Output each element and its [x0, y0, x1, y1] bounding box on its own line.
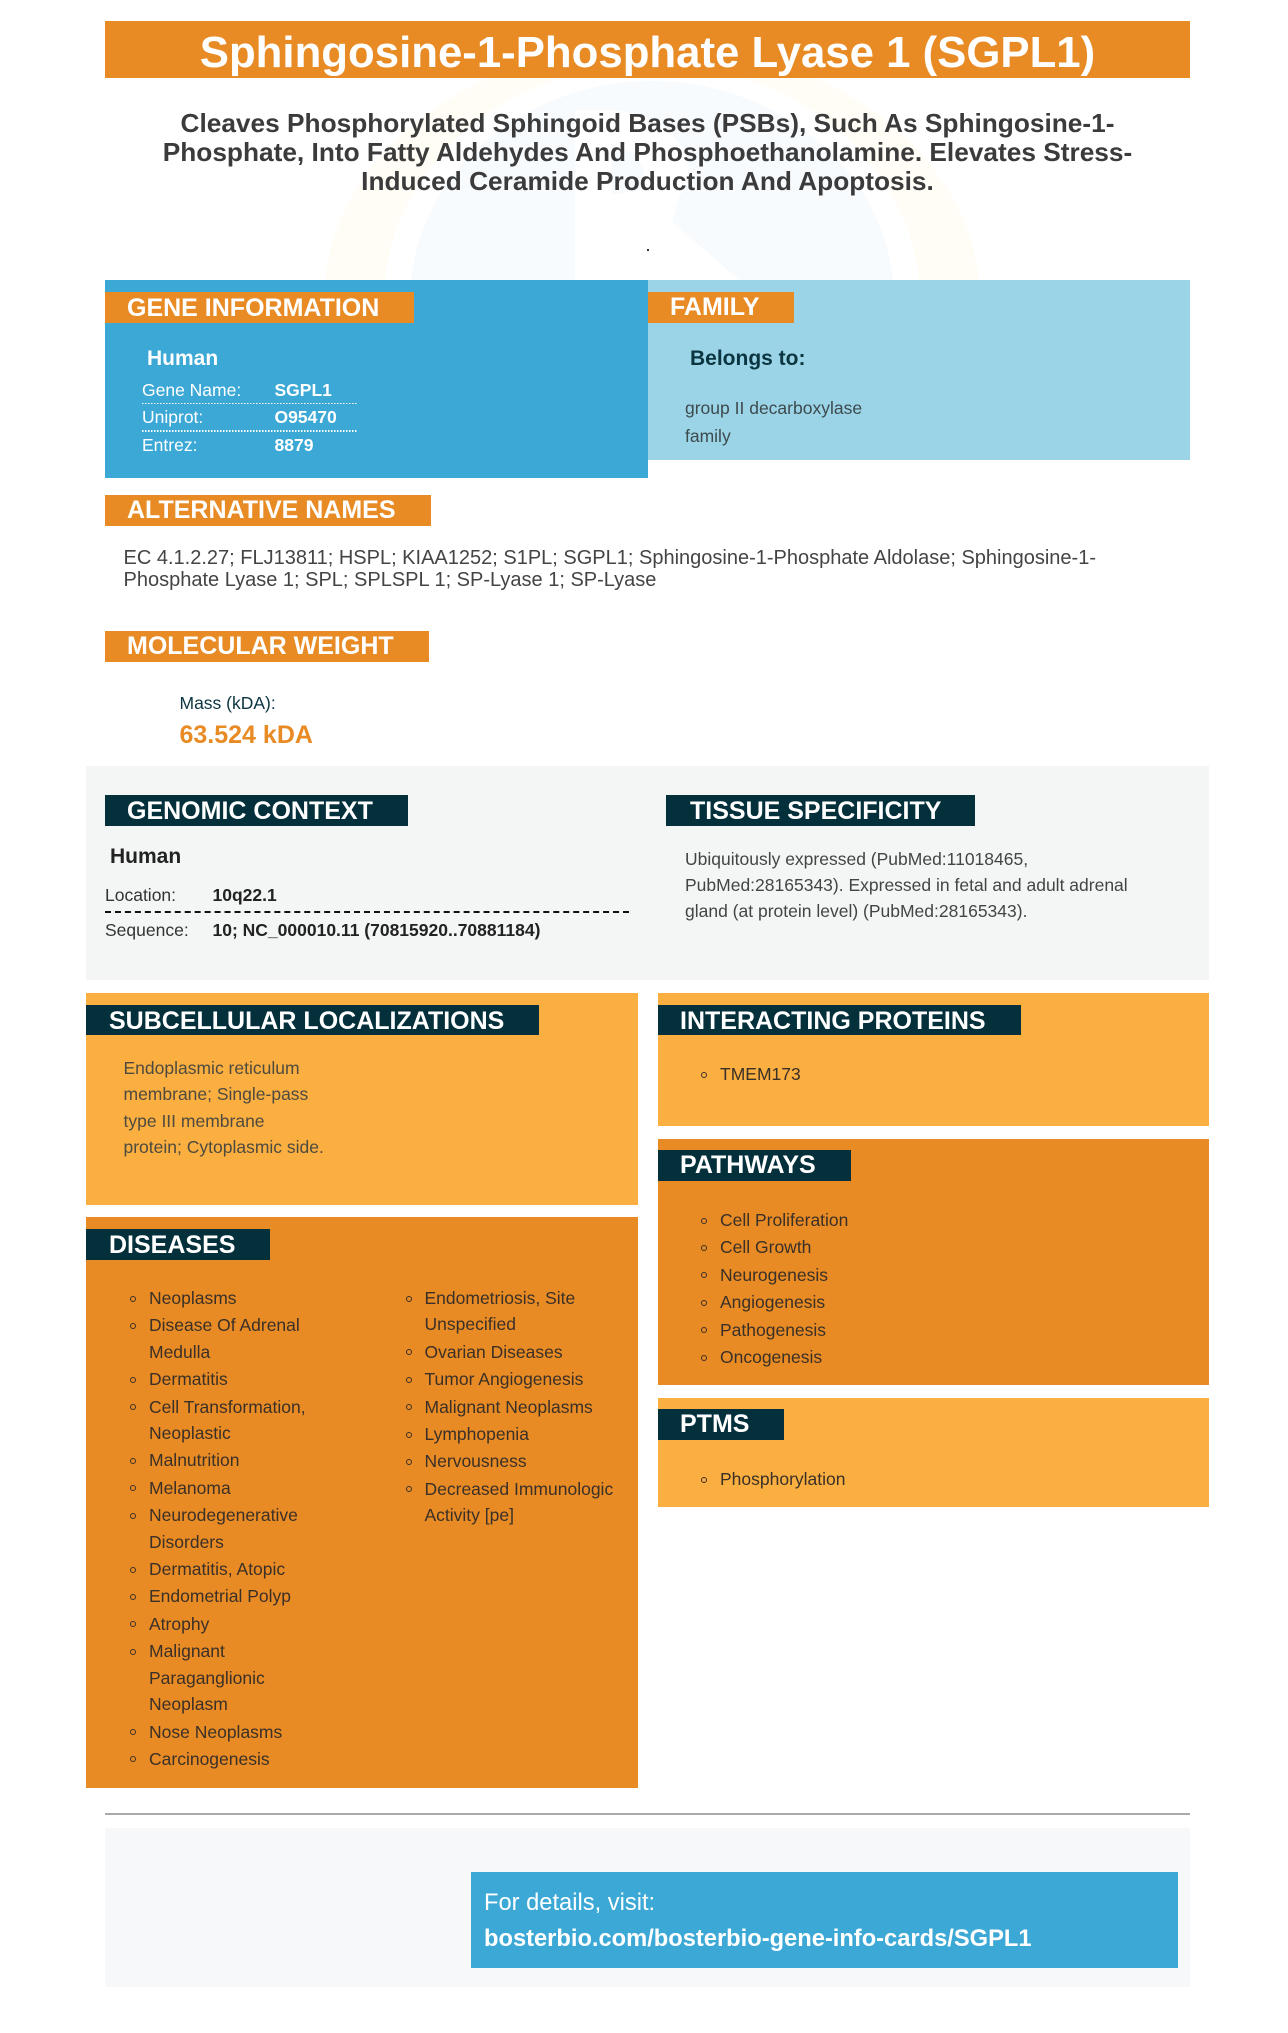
- belongs to label: Belongs to:: [690, 347, 806, 370]
- panel: genomic context and tissue specificity: [86, 766, 1209, 980]
- panel: footer: [105, 1828, 1190, 1987]
- heading: gene information: GENE INFORMATION: [127, 294, 379, 322]
- diseases list column 1: Neurodegenerative Disorders: [149, 1505, 298, 1552]
- diseases list column 1: Neoplasms: [149, 1288, 237, 1308]
- mass label: Mass (kDA):: [180, 693, 276, 713]
- subcellular text: type III membrane: [124, 1111, 265, 1131]
- location row: 10q22.1: [212, 885, 277, 905]
- diseases list column 2: Ovarian Diseases: [424, 1342, 563, 1362]
- uniprot row: O95470: [274, 407, 337, 427]
- panel: interacting proteins: [658, 993, 1209, 1126]
- uniprot row: Uniprot:: [142, 407, 203, 427]
- genomic species label: Human: [110, 845, 181, 868]
- panel: gene information: [105, 280, 648, 478]
- heading: tissue specificity: TISSUE SPECIFICITY: [690, 797, 941, 825]
- pathways list: Cell Growth: [720, 1237, 811, 1257]
- subtitle description: Phosphate, Into Fatty Aldehydes And Phosphoethanolamine. Elevates Stress-: [163, 137, 1132, 167]
- diseases list column 1: Dermatitis, Atopic: [149, 1559, 285, 1579]
- callout: details link: [471, 1872, 1178, 1968]
- heading: alternative names: ALTERNATIVE NAMES: [127, 496, 396, 524]
- callout url: bosterbio.com/bosterbio-gene-info-cards/SGPL1: [484, 1926, 1032, 1952]
- family text: family: [685, 426, 731, 446]
- alternative names text: [124, 546, 1096, 590]
- subtitle description: [163, 108, 1132, 196]
- heading: pathways: PATHWAYS: [680, 1151, 816, 1179]
- diseases list column 1: Cell Transformation, Neoplastic: [149, 1397, 306, 1443]
- diseases list column 1: Melanoma: [149, 1478, 231, 1498]
- panel: family: [648, 280, 1190, 460]
- family text: [685, 398, 862, 446]
- panel: ptms: [658, 1398, 1209, 1507]
- panel: pathways: [658, 1139, 1209, 1385]
- gene name row: Gene Name:: [142, 380, 241, 400]
- small dot: [647, 249, 649, 251]
- tissue specificity text: PubMed:28165343). Expressed in fetal and adult adrenal: [685, 875, 1128, 895]
- ptms list: Phosphorylation: [720, 1469, 846, 1489]
- title: Sphingosine-1-Phosphate Lyase 1 (SGPL1): [200, 28, 1095, 77]
- diseases list column 1: Dermatitis: [149, 1369, 228, 1389]
- subcellular text: membrane; Single-pass: [124, 1084, 308, 1104]
- family text: group II decarboxylase: [685, 398, 862, 418]
- diseases list column 1: Nose Neoplasms: [149, 1722, 282, 1742]
- uniprot row: [142, 407, 337, 427]
- heading: family: FAMILY: [670, 293, 759, 321]
- heading: pathways: [658, 1150, 851, 1181]
- panel: diseases: [86, 1217, 638, 1788]
- heading: interacting proteins: INTERACTING PROTEINS: [680, 1007, 986, 1035]
- pathways list: Cell Proliferation: [720, 1210, 848, 1230]
- heading: ptms: [658, 1409, 784, 1440]
- heading: diseases: DISEASES: [109, 1231, 235, 1259]
- diseases list column 2: Nervousness: [424, 1451, 527, 1471]
- species label: Human: [147, 347, 218, 370]
- pathways list: Neurogenesis: [720, 1265, 828, 1285]
- diseases list column 1: Malnutrition: [149, 1450, 239, 1470]
- background watermark logo: [326, 78, 978, 280]
- heading: molecular weight: MOLECULAR WEIGHT: [127, 632, 394, 660]
- tissue specificity text: [685, 849, 1128, 921]
- sequence row: 10; NC_000010.11 (70815920..70881184): [212, 920, 540, 940]
- diseases list column 1: Malignant: [149, 1641, 225, 1661]
- panel: subcellular localizations: [86, 993, 638, 1205]
- heading: ptms: PTMS: [680, 1410, 749, 1438]
- subtitle description: Cleaves Phosphorylated Sphingoid Bases (PSBs), Such As Sphingosine-1-: [180, 108, 1114, 138]
- panel: alternative names: [105, 495, 1096, 590]
- callout label: For details, visit:: [484, 1890, 655, 1916]
- subcellular text: Endoplasmic reticulum: [124, 1058, 300, 1078]
- diseases list column 2: Endometriosis, Site Unspecified: [424, 1288, 575, 1334]
- entrez row: Entrez:: [142, 435, 197, 455]
- diseases list column 2: Tumor Angiogenesis: [424, 1369, 583, 1389]
- diseases list column 1: Paraganglionic: [149, 1668, 265, 1688]
- diseases list column 1: [130, 1288, 306, 1769]
- heading: genomic context: GENOMIC CONTEXT: [127, 797, 373, 825]
- entrez row: 8879: [274, 435, 313, 455]
- gene name row: SGPL1: [274, 380, 332, 400]
- pathways list: Pathogenesis: [720, 1320, 826, 1340]
- interacting proteins list: TMEM173: [720, 1064, 801, 1084]
- diseases list column 2: Malignant Neoplasms: [424, 1397, 593, 1417]
- alternative names text: Phosphate Lyase 1; SPL; SPLSPL 1; SP-Lyase 1; SP-Lyase: [124, 568, 656, 590]
- diseases list column 1: Atrophy: [149, 1614, 209, 1634]
- gene name row: [142, 380, 332, 400]
- diseases list column 1: Endometrial Polyp: [149, 1586, 291, 1606]
- entrez row: [142, 435, 313, 455]
- heading: family: [648, 292, 794, 323]
- diseases list column 1: Disease Of Adrenal Medulla: [149, 1315, 300, 1362]
- panel: molecular weight: [105, 631, 429, 749]
- subcellular text: [124, 1058, 324, 1157]
- alternative names text: EC 4.1.2.27; FLJ13811; HSPL; KIAA1252; S1PL; SGPL1; Sphingosine-1-Phosphate Aldolase; Sphingosine-1-: [124, 546, 1096, 568]
- tissue specificity text: Ubiquitously expressed (PubMed:11018465,: [685, 849, 1028, 869]
- diseases list column 2: Lymphopenia: [424, 1424, 529, 1444]
- tissue specificity text: gland (at protein level) (PubMed:28165343).: [685, 901, 1027, 921]
- diseases list column 2: [406, 1288, 613, 1525]
- diseases list column 2: Decreased Immunologic Activity [pe]: [424, 1479, 613, 1525]
- sequence row: Sequence:: [105, 920, 189, 940]
- location row: Location:: [105, 885, 176, 905]
- subtitle description: Induced Ceramide Production And Apoptosis.: [361, 166, 934, 196]
- subcellular text: protein; Cytoplasmic side.: [124, 1137, 324, 1157]
- heading: subcellular localizations: SUBCELLULAR LOCALIZATIONS: [109, 1007, 504, 1035]
- mass value: 63.524 kDA: [180, 721, 313, 749]
- pathways list: Oncogenesis: [720, 1347, 822, 1367]
- footer divider: [105, 1813, 1190, 1815]
- pathways list: Angiogenesis: [720, 1292, 825, 1312]
- diseases list column 1: Neoplasm: [149, 1694, 228, 1714]
- heading: diseases: [86, 1229, 270, 1260]
- location row: [105, 882, 629, 913]
- pathways list: [701, 1210, 848, 1367]
- diseases list column 1: Carcinogenesis: [149, 1749, 270, 1769]
